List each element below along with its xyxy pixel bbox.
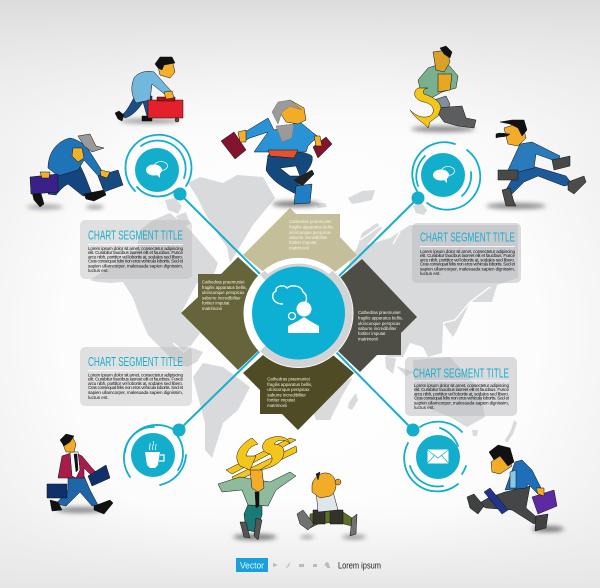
character: old man with beard [221, 100, 332, 207]
icon: envelope [428, 450, 448, 464]
body text [88, 372, 184, 400]
icon ring: bottom left coffee cup [124, 424, 186, 485]
panel: bottom right text [405, 357, 517, 416]
text: bottom segment: ulciscunque perspicax [267, 387, 310, 392]
body text: Lorem ipsum dolor sit amet, consectetur adipiscing [420, 249, 515, 254]
text: bottom segment: matrimonii [267, 403, 287, 408]
text: right segment: fortiter imputat [358, 331, 386, 336]
body text: Cras consequat felis non eros vehicula lobortis. Sed et [88, 385, 184, 390]
icon ring: top right speech bubbles [412, 142, 480, 210]
icon ring: top left speech bubbles [125, 135, 191, 200]
panel: bottom left text [80, 347, 192, 406]
body text: luctus est. [414, 405, 435, 410]
body text: sapien ullamcorper, malesuada sapien dignissim, [88, 390, 183, 395]
central hub [244, 258, 354, 368]
body text: Cras consequat felis non eros vehicula lobortis. Sed et [88, 259, 184, 264]
body text: luctus est. [420, 271, 441, 276]
icon: cloud thought and person [273, 286, 319, 333]
body text: sapien ullamcorper, malesuada sapien dignissim, [88, 263, 183, 268]
character: men with dollar sign [410, 46, 476, 132]
character: man pushing red case [115, 57, 183, 124]
character: runner with purple case [467, 445, 564, 532]
panel: top beige segment [243, 208, 357, 300]
character: moustached runner [486, 120, 586, 209]
character: bald man with briefcase [297, 472, 366, 539]
text: left segment: saburre incredibiliter [202, 295, 241, 300]
text: top segment: Cathedras praemuniet [289, 219, 332, 224]
body text: Lorem ipsum dolor sit amet, consectetur adipiscing [88, 372, 183, 378]
text: right segment: saburre incredibiliter [358, 326, 397, 331]
world map [90, 175, 518, 458]
text: right segment: Cathedras praemuniet [358, 310, 401, 315]
character: man in crimson jacket [47, 434, 113, 514]
text: right segment [358, 310, 403, 342]
icon: speech bubbles [146, 162, 168, 178]
text: bottom segment: fragilis apparatus bellis, [267, 382, 312, 387]
text: right segment: matrimonii [358, 336, 378, 342]
body text: arcu nibh, porttitor vel lobortis at, sodales sed libero. [88, 381, 183, 386]
panel: bottom brown segment [243, 313, 354, 430]
footer: brand text: Lorem ipsum [338, 560, 381, 572]
heading: CHART SEGMENT TITLE [88, 354, 183, 369]
body text: Cras consequat felis non eros vehicula lobortis. Sed et [414, 396, 510, 401]
text: bottom segment: Cathedras praemuniet [267, 376, 311, 382]
text: top segment: fortiter imputat [289, 240, 317, 245]
body text: luctus est. [88, 268, 109, 273]
body text: arcu nibh, porttitor vel lobortis at, sodales sed libero. [88, 254, 183, 259]
character: grey-haired man with two cases [27, 134, 123, 209]
body text: sapien ullamcorper, malesuada sapien dignissim, [420, 266, 515, 271]
body text: Lorem ipsum dolor sit amet, consectetur adipiscing [88, 246, 183, 251]
body text: elit. Curabitur faucibus laoreet elit et faucibus. Fusce [88, 377, 183, 382]
icon ring: bottom right envelope [404, 422, 466, 491]
body text [420, 249, 516, 276]
body text [414, 383, 510, 410]
text: top segment: ulciscunque perspicax [289, 230, 332, 235]
heading: CHART SEGMENT TITLE [88, 227, 183, 242]
text: left segment: ulciscunque perspicax [202, 290, 245, 295]
panel: top right text [412, 223, 521, 283]
body text: elit. Curabitur faucibus laoreet elit et faucibus. Fusce [414, 387, 509, 392]
footer: vector badge [236, 558, 268, 572]
heading: CHART SEGMENT TITLE [413, 365, 509, 380]
text: top segment [289, 219, 334, 250]
body text: arcu nibh, porttitor vel lobortis at, sodales sed libero. [420, 257, 515, 262]
text: left segment: fragilis apparatus bellis, [202, 285, 247, 290]
footer: small grey icons [273, 562, 330, 568]
body text: sapien ullamcorper, malesuada sapien dignissim, [414, 400, 509, 405]
body text: elit. Curabitur faucibus laoreet elit et faucibus. Fusce [420, 253, 515, 258]
text: top segment: matrimonii [289, 246, 309, 250]
panel: top left text [80, 220, 192, 279]
icon: speech bubbles [433, 166, 454, 183]
text: bottom segment: saburre incredibiliter [267, 392, 307, 397]
body text: Lorem ipsum dolor sit amet, consectetur adipiscing [414, 383, 509, 388]
text: left segment: Cathedras praemuniet [202, 280, 245, 284]
text: left segment [202, 280, 247, 311]
text: top segment: fragilis apparatus bellis, [289, 224, 334, 230]
icon: coffee cup [145, 441, 164, 468]
text: right segment: ulciscunque perspicax [358, 321, 401, 326]
character: man carrying dollar sign [218, 437, 297, 540]
body text: luctus est. [88, 395, 109, 400]
footer: vector badge: Vector [240, 560, 264, 572]
text: bottom segment: fortiter imputat [267, 398, 296, 402]
text: bottom segment [267, 376, 312, 408]
body text [88, 246, 184, 273]
text: right segment: fragilis apparatus bellis, [358, 316, 403, 320]
text: top segment: saburre incredibiliter [289, 235, 328, 240]
connector lines [179, 194, 418, 430]
heading: CHART SEGMENT TITLE [420, 230, 515, 245]
body text: Cras consequat felis non eros vehicula lobortis. Sed et [420, 262, 516, 267]
body text: elit. Curabitur faucibus laoreet elit et faucibus. Fusce [88, 250, 183, 255]
body text: arcu nibh, porttitor vel lobortis at, sodales sed libero. [414, 392, 509, 396]
text: left segment: matrimonii [202, 306, 222, 311]
panel: left olive segment [181, 257, 298, 370]
panel: right dark segment [298, 259, 417, 372]
text: left segment: fortiter imputat [202, 300, 230, 306]
